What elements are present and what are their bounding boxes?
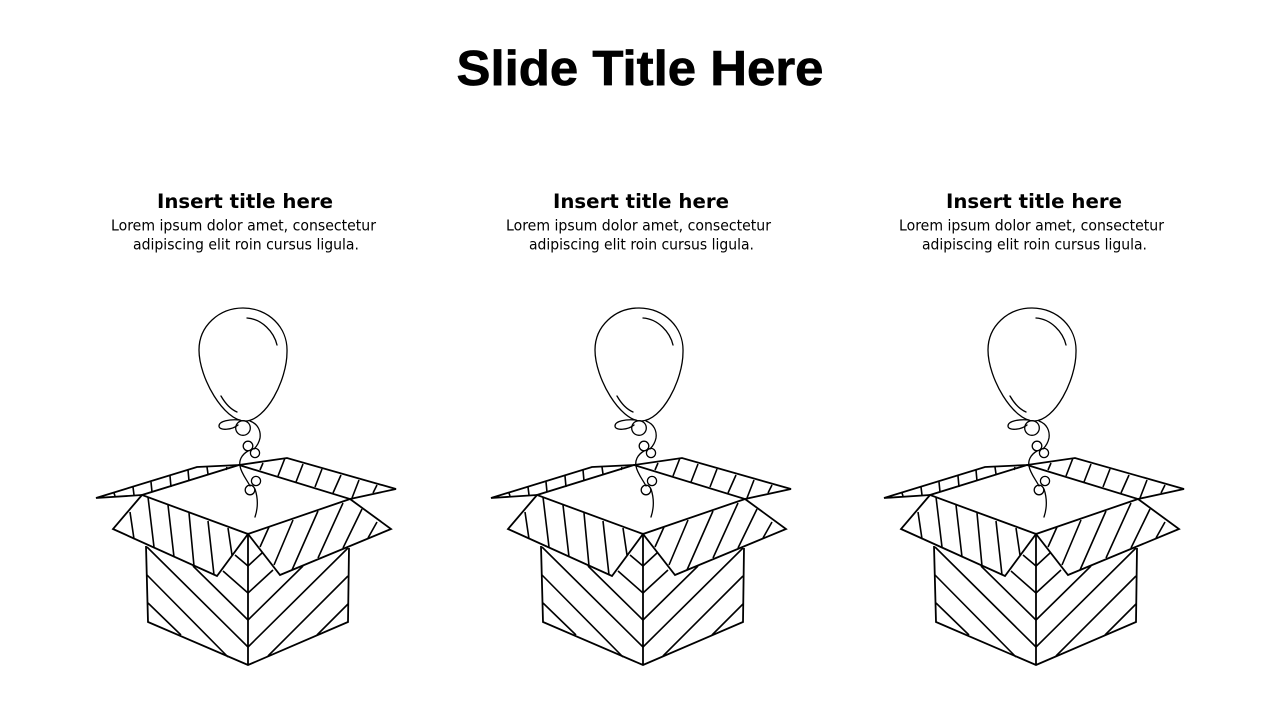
column 1 heading: Insert title here <box>157 190 333 213</box>
balloon 1 <box>199 308 287 517</box>
icon: open gift box with balloon 2 <box>491 308 791 665</box>
column 1 body text <box>111 216 377 254</box>
column 2 text <box>506 190 772 254</box>
column 3 body text: Lorem ipsum dolor amet, consectetur <box>899 216 1165 234</box>
balloon 3 <box>988 308 1076 517</box>
box 1 <box>96 458 396 665</box>
column 3 heading: Insert title here <box>946 190 1122 213</box>
box 3 <box>884 458 1184 665</box>
title: Slide Title Here <box>456 42 824 96</box>
column 1 body text: adipiscing elit roin cursus ligula. <box>133 236 359 254</box>
column 1 body text: Lorem ipsum dolor amet, consectetur <box>111 216 377 234</box>
icon: open gift box with balloon 1 <box>96 308 396 665</box>
column 2 body text: Lorem ipsum dolor amet, consectetur <box>506 216 772 234</box>
column 3 text <box>899 190 1165 254</box>
box 2 <box>491 458 791 665</box>
column 2 body text: adipiscing elit roin cursus ligula. <box>529 236 754 254</box>
column 3 body text <box>899 216 1165 254</box>
icon: open gift box with balloon 3 <box>884 308 1184 665</box>
column 3 body text: adipiscing elit roin cursus ligula. <box>922 236 1147 254</box>
balloon 2 <box>595 308 683 517</box>
column 2 body text <box>506 216 772 254</box>
column 2 heading: Insert title here <box>553 190 729 213</box>
column 1 text <box>111 190 377 254</box>
